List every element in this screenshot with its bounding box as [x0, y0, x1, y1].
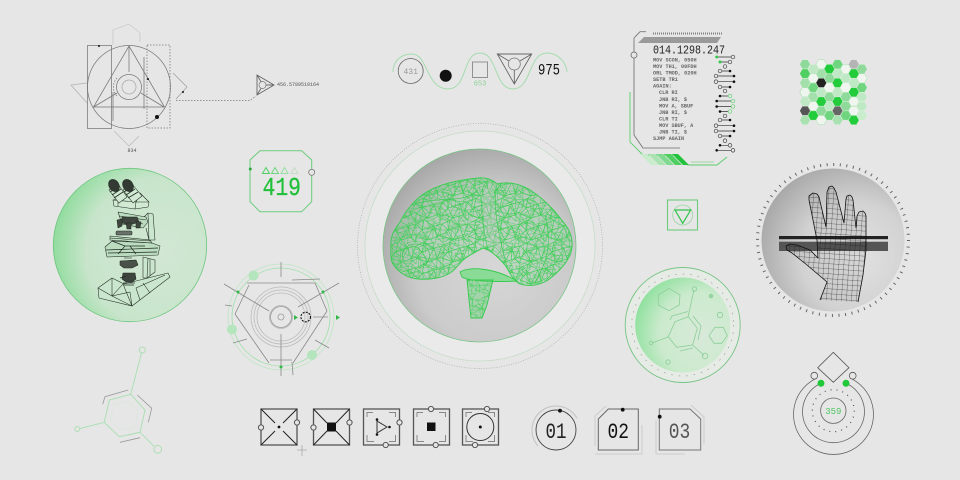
number badge 01	[522, 396, 590, 464]
icon: crosshair mark	[297, 445, 307, 456]
geometric construction diagram	[71, 24, 256, 146]
number badge 02: 02	[608, 420, 629, 445]
honeycomb heat grid	[800, 60, 867, 125]
bottom icon 2: square with core	[311, 409, 352, 445]
bottom icon 1: crossed square	[258, 409, 300, 445]
brain wireframe	[385, 172, 577, 320]
code listing: MOV SCON, 050H	[653, 58, 697, 64]
panel: hand scan disc	[758, 164, 908, 316]
panel: code readout	[630, 32, 735, 165]
wave widget with numbers: 653	[474, 80, 486, 88]
dial widget 359	[794, 352, 874, 454]
target reticle	[224, 262, 340, 376]
code listing: SETB TR1	[653, 77, 678, 83]
base	[98, 273, 170, 306]
head	[113, 193, 149, 209]
label: 419 badge: 419	[262, 173, 301, 203]
panel: microscope disc	[53, 168, 207, 322]
eyepiece tubes	[109, 184, 127, 203]
dial widget 359: 359	[825, 407, 841, 417]
code listing: AGAIN:	[653, 84, 672, 90]
code listing: JNB TI, $	[659, 130, 687, 136]
number badge 02	[595, 406, 642, 454]
small triangle marker with coordinate: 456.5789519164	[277, 82, 319, 88]
column	[143, 257, 155, 278]
panel: petri dish molecule	[625, 268, 740, 382]
panel: code readout: 014.1298.247	[653, 44, 725, 58]
focus knob	[122, 273, 136, 282]
small triangle marker with coordinate	[257, 75, 319, 95]
hand wireframe	[786, 186, 866, 302]
code listing: JNB RI, $	[659, 97, 687, 103]
bottom icon 3: triangle node	[364, 409, 402, 448]
icon: microscope	[98, 177, 170, 306]
code listing: SJMP AGAIN	[653, 136, 684, 142]
number badge 01: 01	[546, 420, 566, 445]
code listing: CLR RI	[659, 90, 678, 96]
condenser	[120, 260, 138, 268]
wave widget with numbers: 975	[538, 62, 560, 80]
bottom icon 5: framed circle	[462, 406, 498, 448]
code listing: MOV A, SBUF	[659, 103, 693, 109]
code listing	[653, 58, 697, 142]
sphere rings	[358, 124, 602, 368]
stage	[105, 241, 160, 257]
code listing: JNB RI, $	[659, 110, 687, 116]
label: 419 badge	[249, 151, 315, 212]
panel: brain sphere	[358, 124, 602, 368]
label: 834: 834	[127, 148, 137, 154]
objective turret	[118, 212, 148, 228]
code listing: MOV SBUF, A	[659, 123, 694, 129]
icon: triangle in circle	[668, 200, 698, 230]
code listing: MOV TH1, 00FDH	[653, 64, 697, 70]
code listing: ORL TMOD, 020H	[653, 71, 697, 77]
molecule outline	[75, 347, 162, 453]
code green stripes	[640, 154, 689, 165]
number badge 03: 03	[669, 420, 690, 445]
wave widget with numbers	[393, 53, 567, 89]
number badge 03	[656, 405, 704, 454]
dna connector strip	[714, 55, 735, 152]
wave widget with numbers: 431	[403, 68, 418, 77]
code listing: CLR TI	[659, 116, 678, 122]
bottom icon 4: framed square	[414, 406, 450, 448]
arm	[148, 213, 155, 240]
